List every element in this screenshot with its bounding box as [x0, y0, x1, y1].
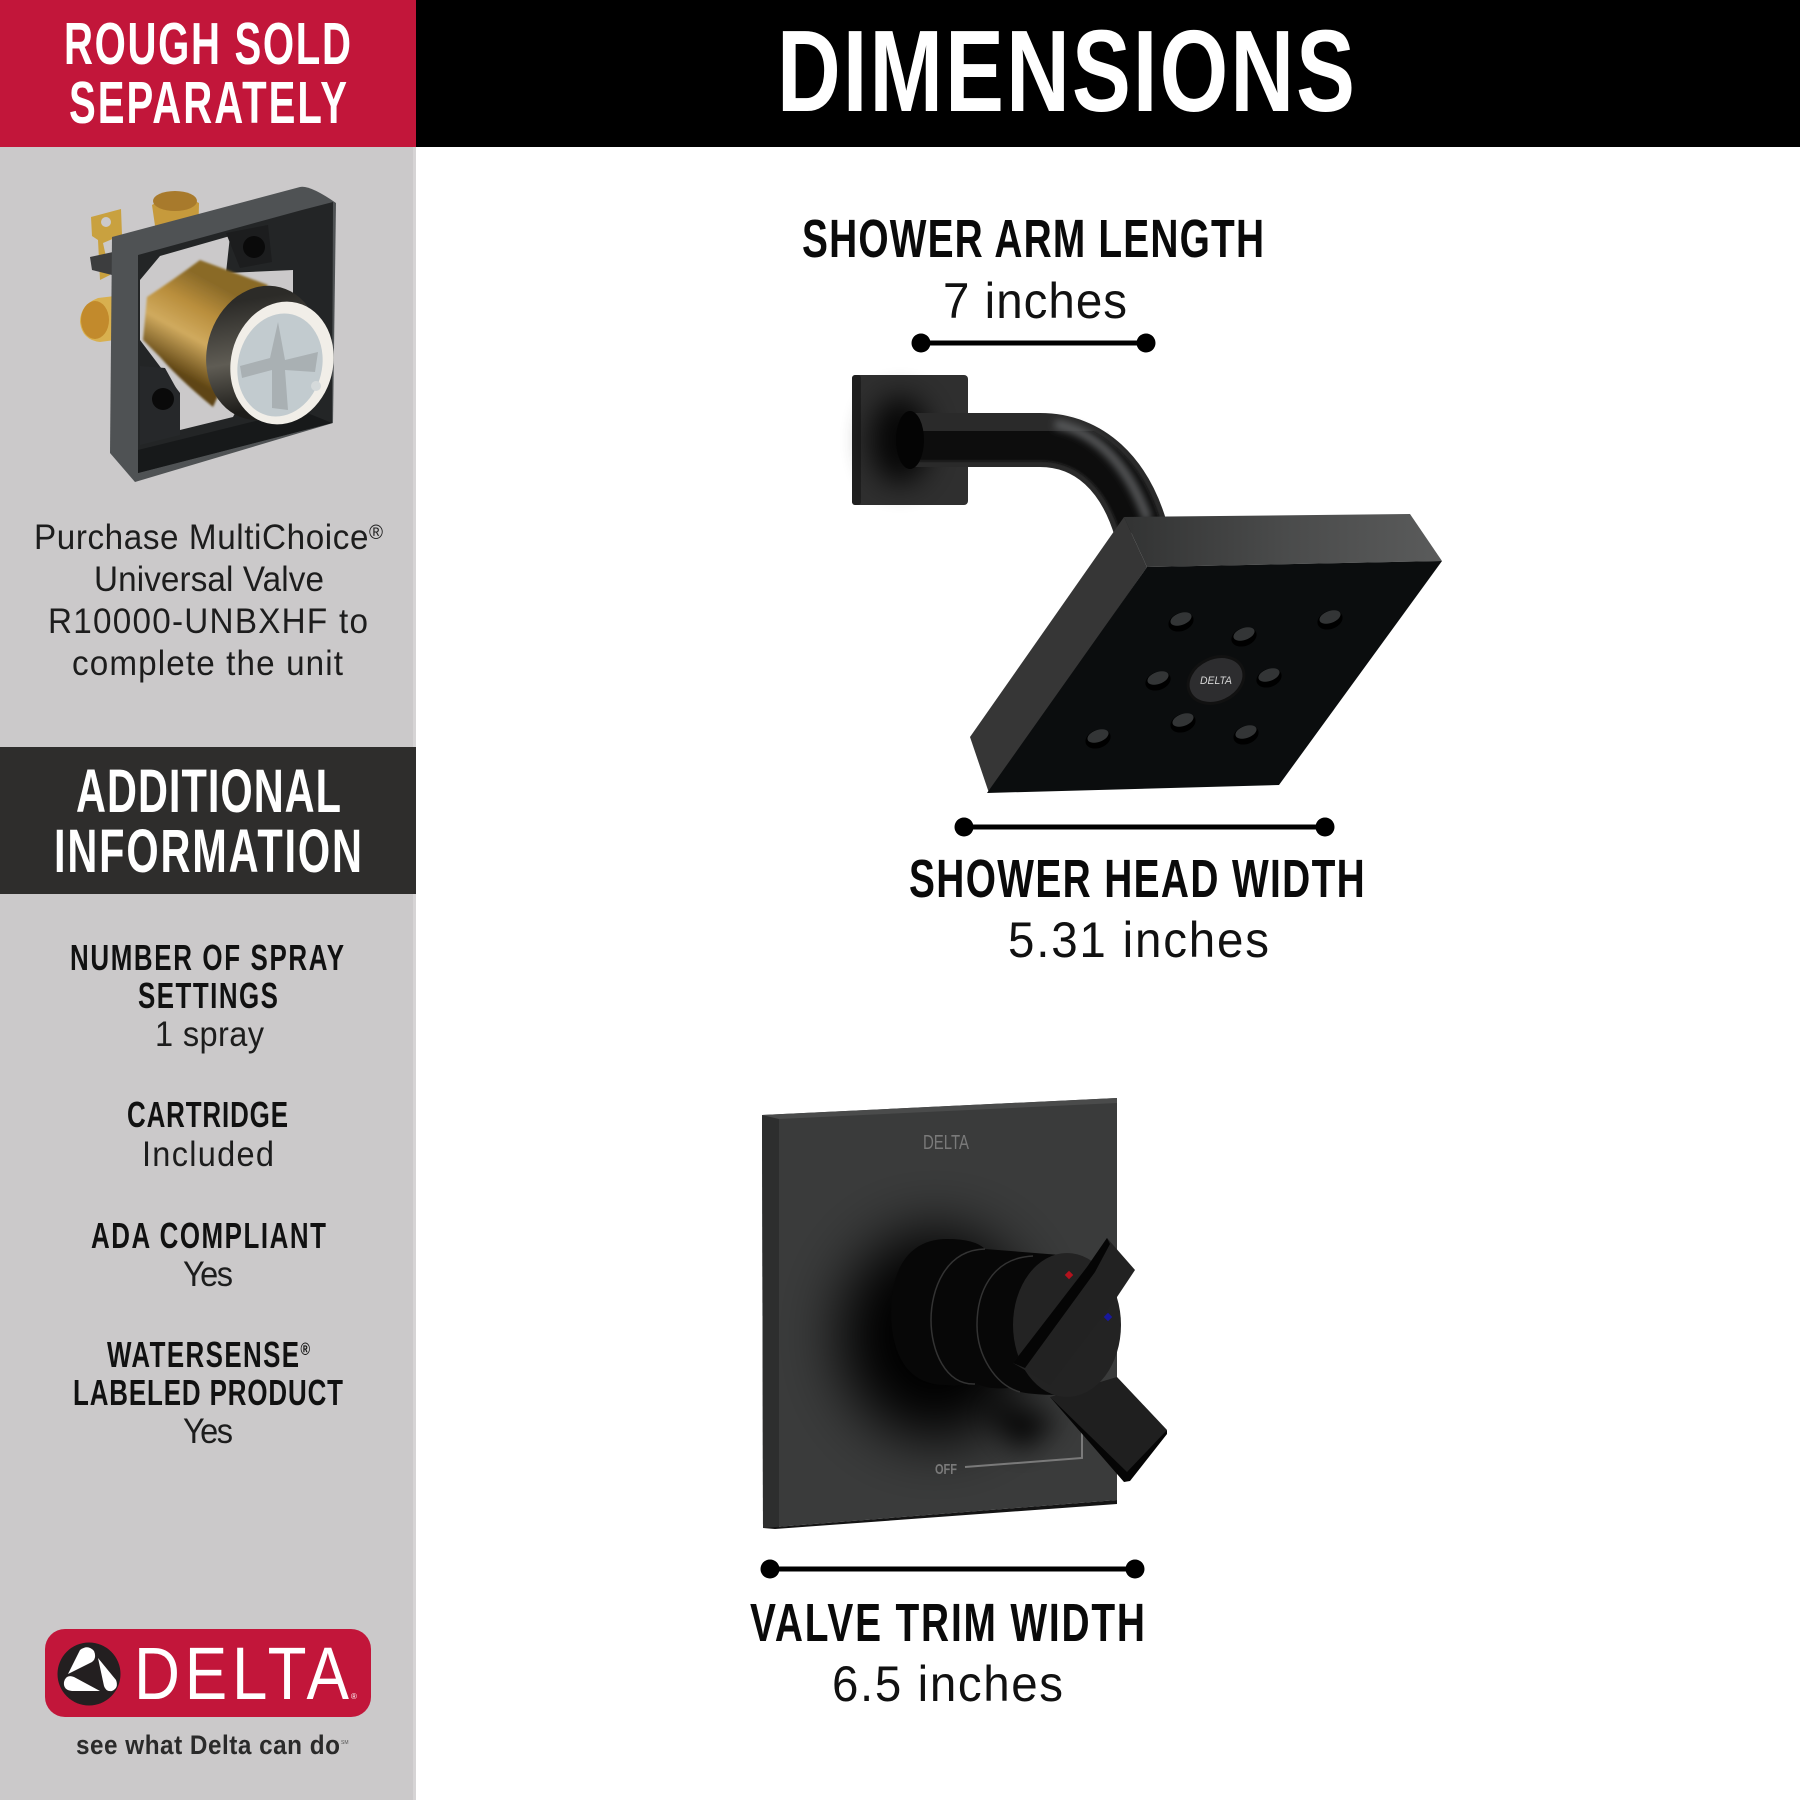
valve trim: DELTA — [923, 1132, 969, 1154]
label: shower head width: 5.31 inches — [1008, 913, 1269, 968]
text: purchase note: R10000-UNBXHF to — [48, 602, 368, 641]
tagline: see what Delta can do — [76, 1731, 340, 1760]
info item: number of spray settings — [70, 938, 344, 1054]
info item: watersense: Yes — [183, 1412, 233, 1451]
banner: additional information — [0, 747, 416, 894]
brass mounting bracket — [91, 209, 122, 280]
dimension line: shower head — [954, 818, 1334, 836]
info item: number of spray settings: 1 spray — [155, 1015, 264, 1054]
logo: delta: DELTA — [134, 1633, 349, 1715]
brass left pipe — [80, 296, 115, 342]
label: valve trim width: VALVE TRIM WIDTH — [750, 1592, 1145, 1652]
banner: rough sold separately — [0, 0, 416, 147]
info item: number of spray settings: NUMBER OF SPRAY — [70, 938, 344, 978]
banner: dimensions title — [416, 0, 1800, 147]
logo: delta — [45, 1629, 371, 1717]
label: valve trim width: 6.5 inches — [832, 1657, 1063, 1712]
frame front — [110, 187, 336, 482]
info item: ada compliant — [91, 1216, 326, 1294]
text: purchase note — [34, 518, 384, 683]
rear screw mounts — [226, 225, 272, 268]
lever lower — [1050, 1377, 1167, 1480]
info item: cartridge: Included — [142, 1135, 274, 1174]
brass top pipe — [152, 197, 199, 300]
shower arm and head — [852, 375, 1442, 793]
nozzles — [1083, 607, 1345, 752]
label: shower arm length: 7 inches — [943, 274, 1127, 329]
panel: left sidebar — [0, 0, 416, 1800]
info item: ada compliant: ADA COMPLIANT — [91, 1216, 326, 1256]
logo: delta: ® — [351, 1692, 357, 1701]
banner: additional information: INFORMATION — [54, 818, 362, 886]
cylinder ridges — [931, 1249, 1033, 1392]
frame interior — [138, 202, 333, 473]
frame window — [140, 236, 293, 430]
banner: additional information: ADDITIONAL — [76, 758, 341, 826]
info item: number of spray settings: SETTINGS — [138, 976, 278, 1016]
info item: watersense — [73, 1335, 343, 1451]
banner: rough sold separately: ROUGH SOLD — [64, 10, 351, 77]
info item: cartridge: CARTRIDGE — [127, 1095, 288, 1135]
shower arm and head: DELTA — [1200, 675, 1232, 687]
cap — [227, 304, 333, 426]
head top side — [1124, 514, 1442, 567]
label: valve trim width — [750, 1592, 1145, 1712]
info item: cartridge — [127, 1095, 288, 1174]
plate shadow — [840, 1230, 1060, 1450]
head front — [987, 561, 1442, 793]
tagline: SM — [341, 1740, 348, 1746]
valve trim: OFF — [935, 1461, 957, 1478]
indicator: cold — [1104, 1313, 1112, 1321]
cylinder hull — [891, 1239, 1100, 1395]
text: purchase note: Universal Valve — [94, 560, 324, 599]
text: purchase note: ® — [369, 522, 384, 544]
text: purchase note: Purchase MultiChoice — [34, 518, 368, 557]
valve trim — [762, 1098, 1167, 1529]
label: shower arm length: SHOWER ARM LENGTH — [802, 208, 1264, 268]
info item: watersense: LABELED PRODUCT — [73, 1373, 343, 1413]
head left side — [970, 517, 1147, 793]
brass body — [143, 260, 268, 407]
chrome ring — [218, 291, 346, 435]
plate — [762, 1098, 1117, 1528]
info item: watersense: ® — [300, 1340, 310, 1360]
banner: rough sold separately: SEPARATELY — [69, 69, 347, 136]
collar — [191, 273, 335, 433]
center badge — [1180, 648, 1252, 712]
arm flange — [896, 411, 924, 469]
icon: rough-in valve — [80, 187, 346, 482]
info item: ada compliant: Yes — [183, 1255, 233, 1294]
banner: dimensions title: DIMENSIONS — [777, 6, 1355, 136]
handle upper — [1013, 1238, 1135, 1385]
dimension line: valve trim — [760, 1560, 1144, 1578]
indicator: hot — [1065, 1271, 1073, 1279]
wall plate — [852, 375, 968, 505]
text: purchase note: complete the unit — [72, 644, 344, 683]
info item: watersense: WATERSENSE — [107, 1335, 299, 1375]
face disc — [1013, 1253, 1121, 1397]
label: shower arm length — [802, 208, 1264, 329]
label: shower head width: SHOWER HEAD WIDTH — [909, 848, 1365, 908]
dimension line: arm — [912, 334, 1156, 352]
arm — [905, 440, 1141, 530]
frame bottom wall — [138, 410, 332, 473]
label: shower head width — [909, 848, 1365, 968]
